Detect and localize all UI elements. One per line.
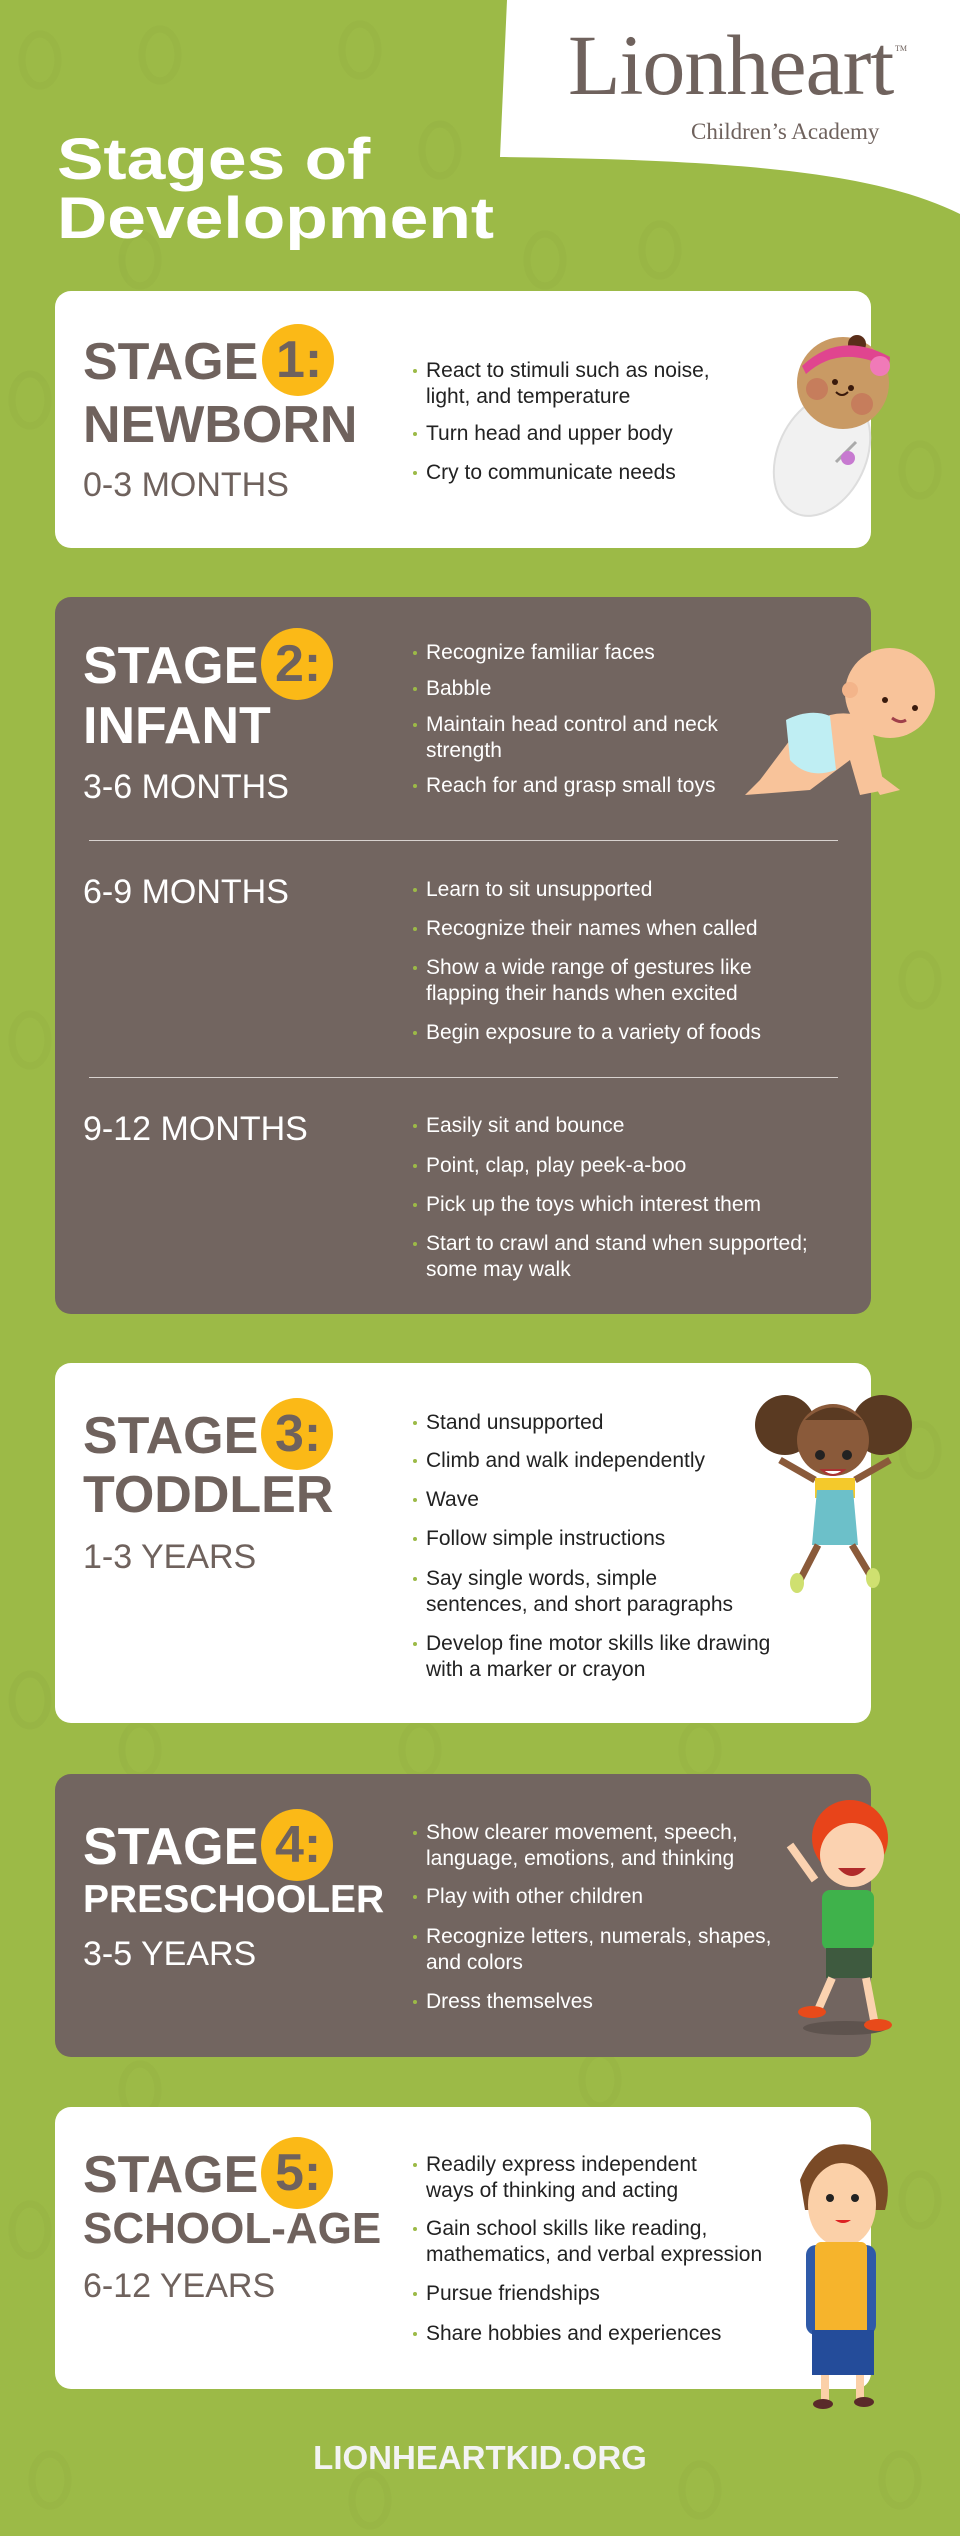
panel: stage 2 infant: Recognize familiar faces — [426, 641, 655, 664]
panel: stage 3 toddler: Say single words, simple — [426, 1567, 657, 1590]
panel: stage 2 infant: Start to crawl and stand when supported; — [426, 1232, 808, 1255]
bullets — [413, 358, 853, 410]
age: 6-12 years: 6-12 YEARS — [83, 2267, 275, 2305]
panel: stage 2 infant: Reach for and grasp small toys — [426, 774, 715, 797]
panel: stage 2 infant: Begin exposure to a variety of foods — [426, 1021, 761, 1044]
panel: stage 4 preschooler: 4: — [275, 1816, 321, 1874]
panel: stage 5 school-age: SCHOOL-AGE — [83, 2204, 381, 2253]
age: 3-6 months: 3-6 MONTHS — [83, 768, 289, 806]
panel: stage 4 preschooler: Recognize letters, numerals, shapes, — [426, 1925, 772, 1948]
panel: stage 2 infant: strength — [426, 739, 502, 762]
panel: stage 5 school-age: Share hobbies and experiences — [426, 2322, 721, 2345]
panel: stage 5 school-age: 5: — [275, 2144, 321, 2202]
logo panel — [500, 0, 960, 214]
panel: stage 3 toddler: TODDLER — [83, 1466, 333, 1524]
panel: stage 5 school-age: Gain school skills like reading, — [426, 2217, 707, 2240]
panel: stage 4 preschooler: Dress themselves — [426, 1990, 593, 2013]
panel: stage 2 infant: some may walk — [426, 1258, 571, 1281]
age: 6-9 months: 6-9 MONTHS — [83, 873, 289, 911]
panel: stage 2 infant: Recognize their names when called — [426, 917, 758, 940]
title: Stages of — [57, 127, 370, 192]
title: Development — [57, 186, 494, 251]
panel: stage 2 infant: INFANT — [83, 697, 271, 755]
panel: stage 3 toddler: Stand unsupported — [426, 1411, 603, 1434]
panel: stage 3 toddler: sentences, and short paragraphs — [426, 1593, 733, 1616]
title — [57, 127, 494, 251]
age: 3-5 years: 3-5 YEARS — [83, 1935, 256, 1973]
panel: stage 2 infant: Maintain head control and neck — [426, 713, 718, 736]
panel: stage 1 newborn: 1: — [276, 331, 322, 389]
panel: stage 4 preschooler: Show clearer movement, speech, — [426, 1821, 738, 1844]
icon: school boy — [800, 2144, 888, 2409]
panel: stage 2 infant: Babble — [426, 677, 491, 700]
panel: stage 1 newborn: Cry to communicate needs — [426, 461, 676, 484]
panel: stage 4 preschooler: language, emotions, and thinking — [426, 1847, 734, 1870]
icon: crawling baby — [745, 648, 935, 795]
heading: stage 2: STAGE — [83, 637, 258, 695]
heading: stage 5: STAGE — [83, 2146, 258, 2204]
heading: stage 1: STAGE — [83, 333, 258, 391]
icon: preschooler boy — [786, 1800, 892, 2035]
heading: stage 4: STAGE — [83, 1818, 258, 1876]
logo wordmark: Lionheart — [568, 17, 893, 113]
footer url: LIONHEARTKID.ORG — [313, 2439, 647, 2476]
bullets: light, and temperature — [426, 385, 630, 408]
panel: stage 5 school-age: Readily express independent — [426, 2153, 697, 2176]
panel: stage 1 newborn: Turn head and upper body — [426, 422, 673, 445]
panel: stage 1 newborn: NEWBORN — [83, 396, 357, 454]
panel: stage 3 toddler: with a marker or crayon — [426, 1658, 645, 1681]
panel: stage 3 toddler: 3: — [275, 1405, 321, 1463]
panel: stage 1 newborn — [55, 291, 890, 548]
panel: stage 3 toddler: Follow simple instructions — [426, 1527, 665, 1550]
panel: stage 2 infant: Show a wide range of gestures like — [426, 956, 752, 979]
panel: stage 3 toddler: Develop fine motor skills like drawing — [426, 1632, 770, 1655]
panel: stage 5 school-age: Pursue friendships — [426, 2282, 600, 2305]
icon: swaddled newborn — [772, 335, 890, 517]
panel: stage 3 toddler — [55, 1363, 912, 1723]
panel: stage 2 infant: Point, clap, play peek-a-boo — [426, 1154, 686, 1177]
panel: stage 2 infant: 2: — [275, 635, 321, 693]
panel: stage 2 infant: Easily sit and bounce — [426, 1114, 624, 1137]
icon: toddler girl — [755, 1395, 912, 1593]
panel: stage 2 infant — [55, 597, 935, 1314]
heading: stage 3: STAGE — [83, 1407, 258, 1465]
logo subtitle: Children’s Academy — [691, 119, 879, 144]
panel: stage 2 infant: Pick up the toys which interest them — [426, 1193, 761, 1216]
age: 0-3 months: 0-3 MONTHS — [83, 466, 289, 504]
panel: stage 2 infant: flapping their hands when excited — [426, 982, 738, 1005]
bullets: React to stimuli such as noise, — [426, 359, 710, 382]
logo panel: TM — [895, 44, 907, 53]
panel: stage 4 preschooler: Play with other children — [426, 1885, 643, 1908]
panel: stage 2 infant: Learn to sit unsupported — [426, 878, 652, 901]
panel: stage 4 preschooler: and colors — [426, 1951, 523, 1974]
age: 1-3 years: 1-3 YEARS — [83, 1538, 256, 1576]
panel: stage 3 toddler: Climb and walk independently — [426, 1449, 705, 1472]
panel: stage 5 school-age: ways of thinking and acting — [426, 2179, 678, 2202]
panel: stage 5 school-age: mathematics, and verbal expression — [426, 2243, 762, 2266]
panel: stage 4 preschooler: PRESCHOOLER — [83, 1878, 384, 1921]
panel: stage 3 toddler: Wave — [426, 1488, 479, 1511]
age: 9-12 months: 9-12 MONTHS — [83, 1110, 308, 1148]
